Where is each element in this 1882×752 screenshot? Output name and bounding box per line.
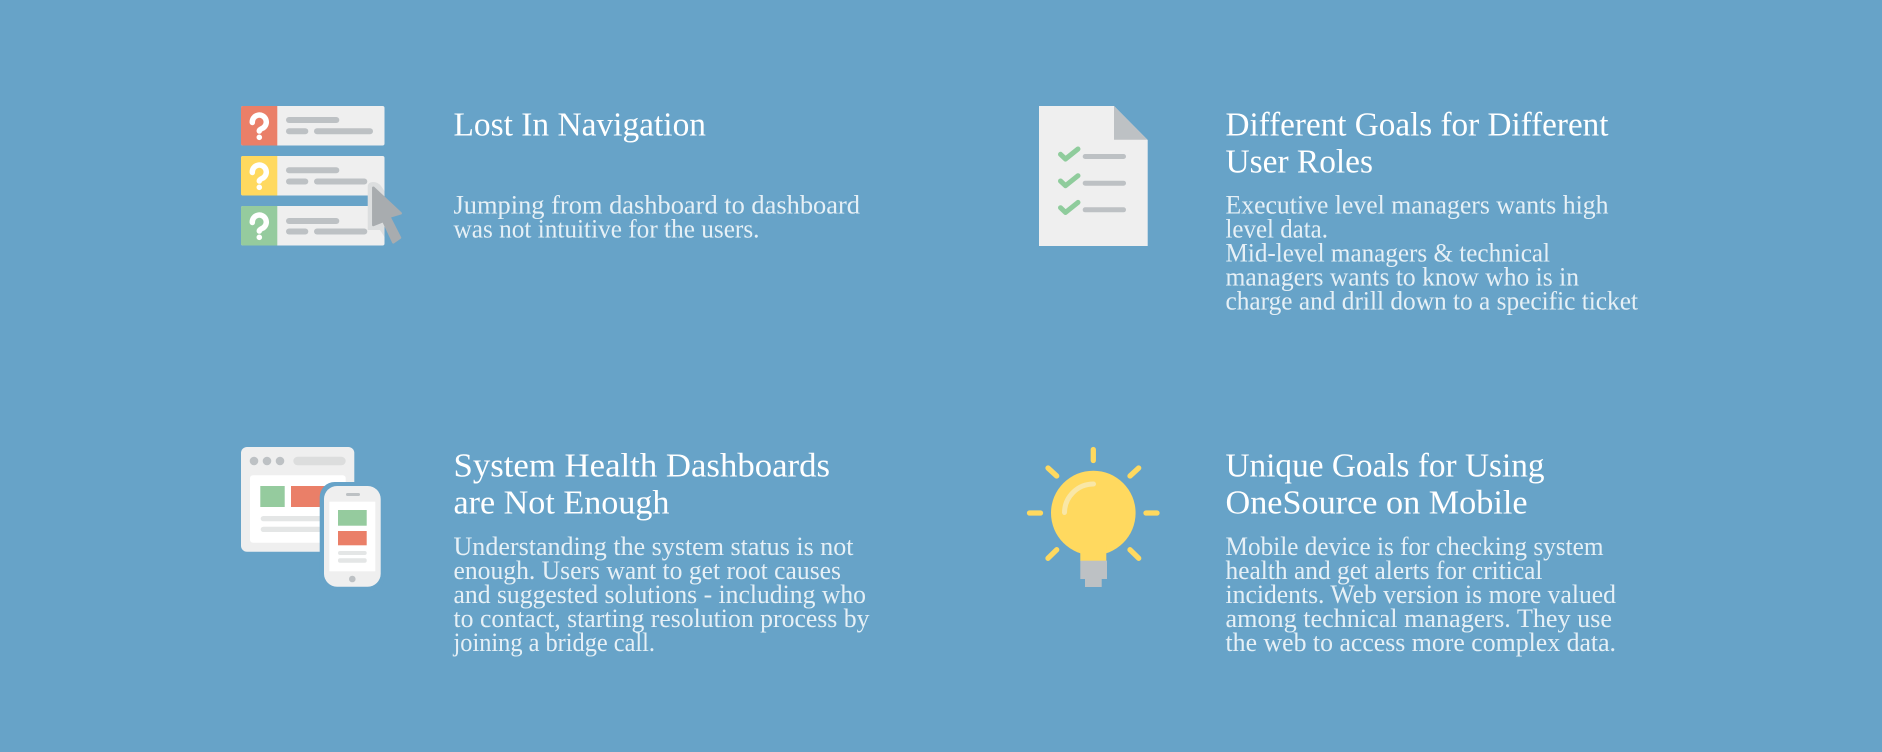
body text: enough. Users want to get root causes <box>454 556 841 585</box>
heading: are Not Enough <box>454 484 670 522</box>
body text <box>453 532 870 657</box>
body text: joining a bridge call. <box>453 628 655 657</box>
body text: among technical managers. They use <box>1226 604 1612 633</box>
heading <box>1226 107 1609 181</box>
icon: light bulb <box>1030 450 1157 587</box>
body text <box>454 190 860 243</box>
body text: to contact, starting resolution process by <box>454 604 870 633</box>
body text <box>1226 190 1639 315</box>
body text: Understanding the system status is not <box>454 532 854 561</box>
icon: list with question marks and cursor <box>241 106 401 246</box>
body text: was not intuitive for the users. <box>454 214 760 243</box>
heading <box>1226 448 1544 522</box>
icon: checklist document <box>1039 106 1148 246</box>
body text <box>1226 532 1616 657</box>
body text: Mobile device is for checking system <box>1226 532 1604 561</box>
heading: Different Goals for Different <box>1226 107 1609 144</box>
body text: health and get alerts for critical <box>1226 556 1542 585</box>
body text: Jumping from dashboard to dashboard <box>454 190 860 219</box>
body text: the web to access more complex data. <box>1226 628 1616 657</box>
heading: System Health Dashboards <box>454 448 830 484</box>
panel: system health dashboards are not enough <box>241 447 870 657</box>
panel: lost in navigation <box>241 106 860 246</box>
heading: User Roles <box>1226 144 1373 181</box>
body text: Mid-level managers & technical <box>1226 238 1550 267</box>
body text: incidents. Web version is more valued <box>1226 580 1616 609</box>
body text: managers wants to know who is in <box>1226 262 1579 291</box>
panel: different goals for different user roles <box>1039 106 1639 315</box>
icon: browser and phone dashboards <box>241 447 385 591</box>
body text: charge and drill down to a specific ticket <box>1226 286 1639 315</box>
heading: OneSource on Mobile <box>1226 484 1528 522</box>
body text: level data. <box>1226 214 1328 243</box>
body text: and suggested solutions - including who <box>454 580 866 609</box>
body text: Executive level managers wants high <box>1226 190 1608 219</box>
heading: Unique Goals for Using <box>1226 448 1544 484</box>
heading: Lost In Navigation <box>454 107 706 144</box>
panel: unique goals for using onesource on mobile <box>1030 448 1616 657</box>
heading <box>454 448 830 522</box>
